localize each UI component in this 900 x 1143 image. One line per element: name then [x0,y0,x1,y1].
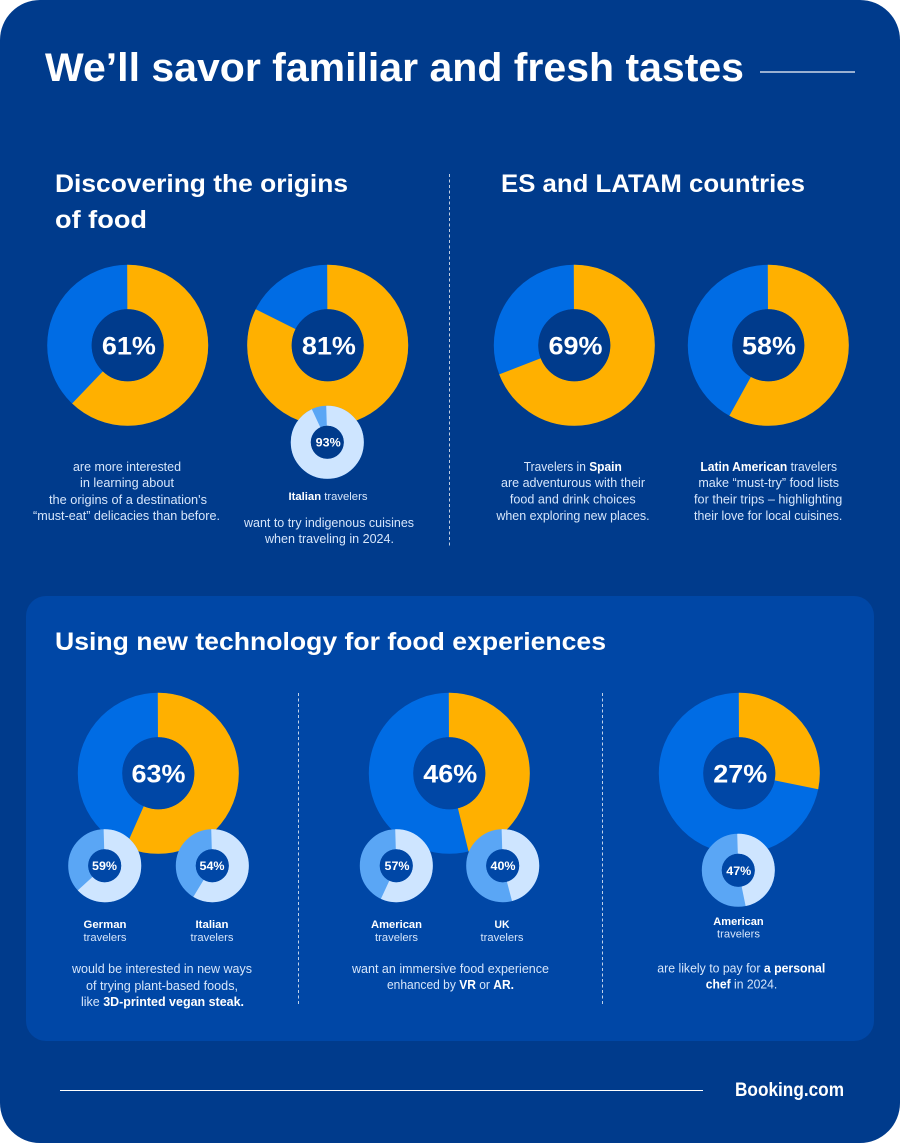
text: Latin American description: make “must-try” food lists [698,476,839,490]
footer rule [60,1090,703,1091]
label: German travelers [84,919,127,944]
text: Latin American description: for their trips – highlighting [694,493,842,507]
donut: 93% Italian [301,416,354,469]
text: 61% description: the origins of a destination's [49,493,207,507]
donut: 57% American [370,839,423,892]
donut: 40% UK: 40% [490,859,516,873]
donut: 63%: 63% [132,760,186,788]
label: Italian travelers: travelers [190,932,234,944]
logo: Booking.com: Booking.com [735,1080,844,1101]
donut: 81%: 81% [302,332,356,360]
donut: 47% American: 47% [726,864,752,878]
label: American travelers [371,919,422,944]
text: 61% description [33,460,220,523]
donut: 63% [100,715,217,832]
donut: 27% [681,715,798,832]
donut: 59% German: 59% [92,859,117,873]
heading: discovering: Discovering the origins [55,170,348,198]
donut: 46% [391,715,508,832]
title: We’ll savor familiar and fresh tastes [45,46,744,90]
label: American travelers: American [371,919,422,931]
donut: 47% American [712,844,765,897]
donut: 69%: 69% [548,332,602,360]
text: plant-based description: of trying plant-based foods, [86,979,238,993]
donut: 81% [269,287,386,404]
label: American travelers [713,916,764,940]
label: American travelers: American [713,916,764,928]
donut: 61%: 61% [102,332,156,360]
text: plant-based description: like 3D-printed vegan steak. [81,995,244,1009]
text: VR description: enhanced by VR or AR. [387,978,514,992]
donut: 59% German [78,839,131,892]
label: UK travelers: travelers [480,932,524,944]
text: Spain description: when exploring new places. [495,509,650,523]
label: American travelers: travelers [717,928,761,940]
donut: 40% UK [476,839,529,892]
text: personal chef description [657,962,825,992]
donut: 69% [516,287,633,404]
donut: 58% [710,287,827,404]
panel: ES and LATAM countries [495,170,842,523]
donut: 57% American: 57% [384,859,410,873]
text: Latin American description [694,460,842,523]
label: UK travelers: UK [494,919,510,931]
panel: discovering the origins of food [33,170,414,546]
label: Italian travelers [190,919,234,944]
text: Spain description: are adventurous with their [501,476,645,490]
donut: 27%: 27% [713,760,767,788]
text: 61% description: are more interested [73,460,181,474]
label: German travelers: travelers [84,932,127,944]
donut: 54% Italian [186,839,239,892]
donut: 58%: 58% [742,332,796,360]
text: Latin American description: their love for local cuisines. [694,509,842,523]
donut: 54% Italian: 54% [200,859,225,873]
heading: discovering: of food [55,206,147,234]
donut: 46%: 46% [423,760,477,788]
text: personal chef description: chef in 2024. [706,978,777,992]
heading: technology: Using new technology for food experiences [55,628,606,656]
text: 81% description [243,516,414,546]
heading: ES and LATAM: ES and LATAM countries [501,170,805,198]
text: 61% description: in learning about [80,476,175,490]
text: Latin American description: Latin American travelers [700,460,837,474]
text: 61% description: “must-eat” delicacies than before. [33,509,220,523]
label: American travelers: travelers [375,932,419,944]
text: 81% description: when traveling in 2024. [264,532,394,546]
text: VR description: want an immersive food experience [351,962,549,976]
donut: 93% Italian: 93% [316,436,341,450]
panel: using new technology [26,596,874,1041]
text: 81% description: want to try indigenous cuisines [243,516,414,530]
label: German travelers: German [84,919,127,931]
text: VR description [351,962,549,992]
text: plant-based description: would be interested in new ways [71,962,252,976]
label: Italian travelers: Italian travelers [288,491,368,503]
donut: 61% [69,287,186,404]
text: plant-based description [71,962,252,1009]
text: Spain description [495,460,650,523]
text: personal chef description: are likely to pay for a personal [657,962,825,976]
text: Spain description: Travelers in Spain [524,460,622,474]
label: Italian travelers: Italian [196,919,229,931]
text: Spain description: food and drink choices [510,493,636,507]
label: UK travelers [480,919,524,944]
